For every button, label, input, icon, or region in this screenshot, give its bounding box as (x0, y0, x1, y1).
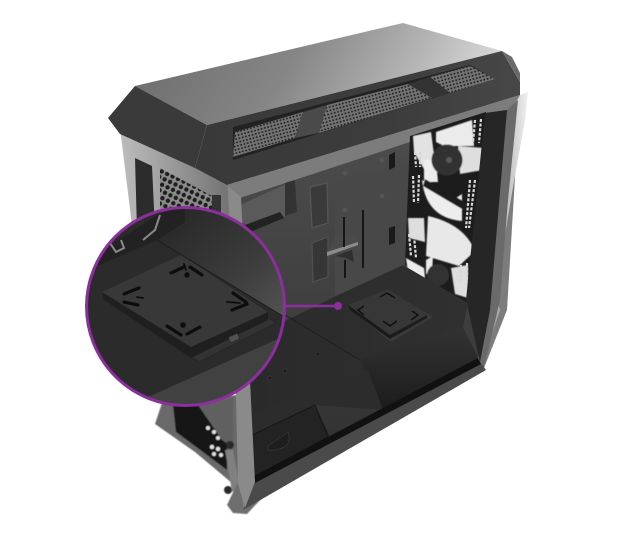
right silver edge (490, 92, 528, 340)
shroud top floor (246, 265, 468, 417)
right inner dark rail (466, 110, 507, 362)
right grey frame (478, 100, 518, 368)
lens border (86, 208, 284, 406)
back wall (98, 210, 185, 265)
motherboard details (240, 152, 420, 297)
psu cover (248, 362, 480, 480)
plate screw (228, 333, 240, 343)
left side panel (120, 128, 240, 300)
floor small plate (348, 289, 433, 342)
psu cover seam (248, 405, 328, 478)
rear lower section with psu opening (155, 395, 262, 514)
bottom frame (243, 362, 486, 510)
top panel (135, 23, 502, 125)
cable shapes (110, 215, 160, 252)
shroud front left (246, 370, 383, 437)
upper fan (413, 120, 485, 221)
bottom dark line (252, 358, 481, 484)
plate flange (192, 318, 276, 362)
floor seam (285, 315, 360, 360)
magnified detail circle (80, 200, 290, 410)
top left facet (108, 86, 207, 168)
shroud front right (360, 327, 478, 410)
corner cap (502, 51, 520, 82)
callout: connector line and dot (285, 302, 342, 310)
lower fan (406, 216, 475, 298)
floor screw holes (268, 352, 320, 380)
upper right lit surface (194, 224, 283, 316)
front top bar (195, 51, 520, 185)
mount slots (124, 267, 247, 335)
mounting plate (102, 255, 268, 358)
fan frame vent strips (409, 119, 481, 283)
recessed vent channel (233, 65, 495, 160)
lower floor panel (149, 340, 277, 404)
panel seam (157, 240, 286, 318)
psu cover logo (268, 432, 289, 450)
infographic: PC case with magnified detail (85, 23, 528, 515)
vent mesh (233, 66, 495, 157)
left window post (228, 186, 255, 508)
interior back wall (240, 110, 507, 480)
window frame (227, 95, 520, 510)
fan block dark frame (405, 112, 486, 305)
PC case (108, 23, 528, 514)
